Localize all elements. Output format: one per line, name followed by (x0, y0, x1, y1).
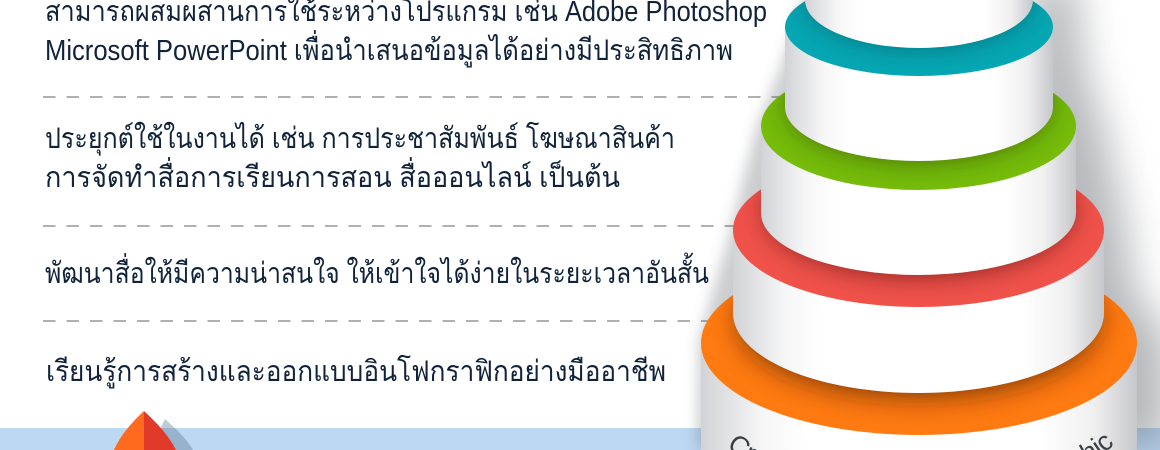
stacked cylinder shadow (697, 0, 1160, 450)
icon: paper boat sail (114, 411, 193, 450)
tier: green (761, 92, 1076, 275)
text: line six: เรียนรู้การสร้างและออกแบบอินโฟกราฟิกอย่างมืออาชีพ (46, 354, 666, 389)
stacked cylinder diagram (701, 0, 1137, 450)
divider one (43, 96, 790, 98)
blue ground band (0, 428, 1160, 450)
text: line four: การจัดทำสื่อการเรียนการสอน สื่อออนไลน์ เป็นต้น (45, 157, 620, 194)
tier: red (733, 189, 1104, 393)
tier: orange base (701, 294, 1137, 450)
text list (43, 0, 790, 389)
text: line five: พัฒนาสื่อให้มีความน่าสนใจ ให้เข้าใจได้ง่ายในระยะเวลาอันสั้น (45, 252, 709, 290)
text: line three: ประยุกต์ใช้ในงานได้ เช่น การประชาสัมพันธ์ โฆษณาสินค้า (45, 121, 675, 156)
divider three (43, 320, 730, 322)
text: line two: Microsoft PowerPoint เพื่อนำเสนอข้อมูลได้อย่างมีประสิทธิภาพ (45, 30, 733, 68)
divider two (43, 225, 760, 227)
tier: top white (805, 0, 1033, 48)
tier: teal (785, 0, 1053, 161)
